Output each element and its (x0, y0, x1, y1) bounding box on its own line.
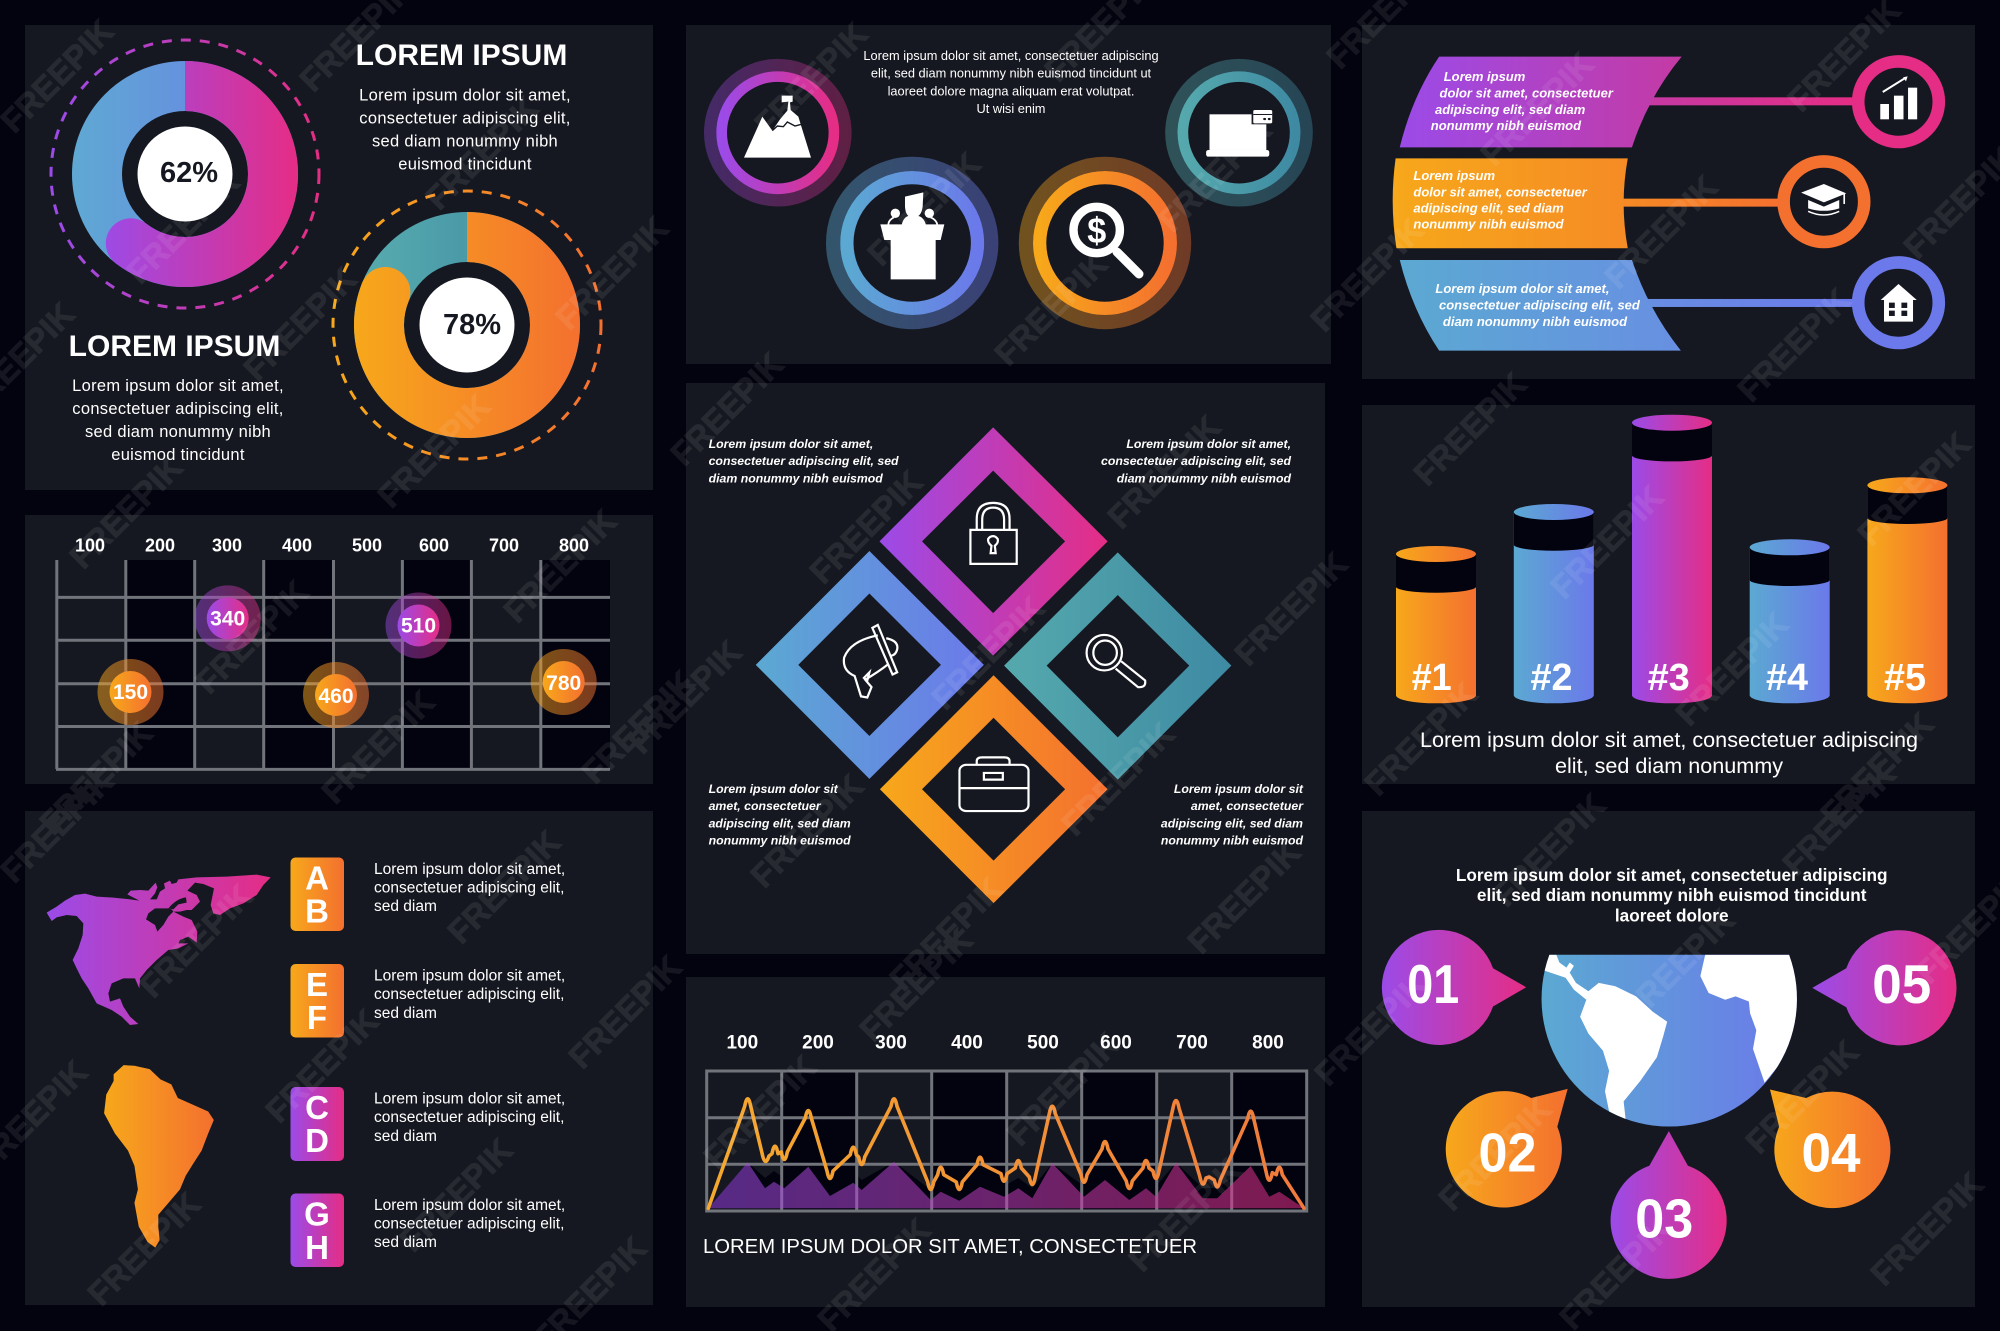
text block: top left: Lorem ipsum dolor sit amet, (709, 437, 873, 451)
watermarks: FREEPIK (1850, 425, 1978, 553)
axis labels: 500 (1027, 1032, 1059, 1054)
axis labels: 100 (75, 536, 105, 556)
text block: C D: consectetuer adipiscing elit, (374, 1109, 564, 1126)
cylinder: #4: #4 (1766, 657, 1808, 699)
icon: laptop (1206, 109, 1273, 157)
ring icon: house (1858, 262, 1939, 343)
text block: intro: Lorem ipsum dolor sit amet, consectetuer adipiscing (863, 48, 1159, 63)
text block: top right: consectetuer adipiscing elit, sed (1101, 454, 1291, 468)
watermarks: FREEPIK (440, 823, 568, 951)
callout: 03 (1611, 1131, 1727, 1279)
cylinder: #2 (1514, 504, 1594, 703)
text block: bottom left: sed diam nonummy nibh (85, 423, 271, 441)
badge: A B: A (305, 860, 329, 897)
text block: top right: Lorem ipsum dolor sit amet, (1126, 437, 1291, 451)
axis labels: 300 (875, 1032, 907, 1054)
text block: E F: sed diam (374, 1005, 437, 1022)
donut chart: 78%: 78% (443, 309, 501, 341)
callout number: 05: 05 (1872, 953, 1931, 1015)
icon: magnifier with dollar (1074, 207, 1139, 274)
caption: elit, sed diam nonummy (1555, 753, 1783, 778)
text block: A B: Lorem ipsum dolor sit amet, (374, 861, 565, 878)
watermarks: FREEPIK (743, 767, 871, 895)
axis labels: 700 (489, 536, 519, 556)
heading: bottom left: LOREM IPSUM (69, 330, 280, 363)
axis labels: 400 (282, 536, 312, 556)
text block: E F (374, 968, 565, 1022)
text block: top right (359, 86, 571, 174)
diamond: megaphone (756, 551, 984, 779)
cylinder: #3 (1632, 415, 1712, 703)
cylinder: #2: #2 (1530, 657, 1572, 699)
caption (1420, 727, 1918, 778)
callout: 02 (1446, 1089, 1568, 1208)
text block: blue band: consectetuer adipiscing elit, sed (1439, 298, 1641, 312)
badge: G H (290, 1194, 344, 1267)
ring icon: bar chart (1858, 61, 1939, 142)
text block: bottom right (1161, 782, 1304, 848)
ring: mountain (710, 65, 845, 200)
text block: A B: consectetuer adipiscing elit, (374, 880, 564, 897)
icon: podium speaker (880, 192, 944, 279)
text block: A B (374, 861, 565, 915)
globe (1541, 952, 1802, 1127)
chart: grid, area and line (707, 1071, 1307, 1211)
watermarks: FREEPIK (1775, 755, 1903, 883)
badge: E F (290, 964, 344, 1038)
callout: 05 (1812, 930, 1957, 1045)
watermarks: FREEPIK (1668, 605, 1796, 733)
badge: C D: C (305, 1089, 329, 1126)
icon: mountain with flag (744, 96, 811, 158)
text block: orange band (1413, 168, 1588, 232)
text block: bottom left: nonummy nibh euismod (709, 834, 851, 848)
band: blue (1400, 260, 1681, 351)
watermarks: FREEPIK (1100, 408, 1228, 536)
panel: icon rings (686, 25, 1331, 364)
watermarks: FREEPIK (663, 345, 791, 473)
callout: 04 (1770, 1090, 1890, 1208)
watermarks: FREEPIK (999, 1025, 1127, 1153)
text block: bottom left: consectetuer adipiscing elit, (72, 400, 284, 418)
panel: donut charts (25, 25, 653, 490)
text block: top right: sed diam nonummy nibh (372, 132, 558, 150)
watermarks: FREEPIK (1227, 545, 1355, 673)
text block: blue band: Lorem ipsum dolor sit amet, (1435, 281, 1609, 296)
text block: C D: Lorem ipsum dolor sit amet, (374, 1090, 565, 1108)
text block: A B: sed diam (374, 898, 437, 915)
icon: briefcase (959, 757, 1029, 811)
watermarks: FREEPIK (860, 145, 988, 273)
axis labels: 100 (726, 1032, 758, 1054)
axis labels: 500 (352, 536, 382, 556)
text block: blue band (1435, 281, 1641, 329)
axis labels: 600 (1100, 1032, 1132, 1054)
watermarks: FREEPIK (1738, 1033, 1866, 1161)
text block: top left (709, 437, 899, 486)
panel: curved bands (1362, 25, 1975, 379)
watermarks: FREEPIK (924, 589, 1052, 717)
badge: C D: D (305, 1122, 329, 1159)
text block: bottom right: amet, consectetuer (1191, 799, 1304, 813)
watermarks: FREEPIK (258, 1002, 386, 1130)
map: south america (104, 1065, 214, 1248)
cylinder: #4 (1750, 539, 1830, 703)
badge: E F: E (306, 966, 328, 1003)
bubble: 150 (98, 659, 164, 725)
text block: E F: consectetuer adipiscing elit, (374, 986, 564, 1003)
diamond: briefcase (880, 675, 1108, 903)
ring: laptop (1171, 65, 1307, 200)
watermarks: FREEPIK (1303, 211, 1431, 339)
text block: C D: sed diam (374, 1128, 437, 1145)
connector: band 2 (1619, 199, 1781, 207)
watermarks: FREEPIK (1357, 675, 1485, 803)
heading: top right: LOREM IPSUM (356, 39, 567, 72)
text block: purple band: Lorem ipsum (1444, 69, 1526, 84)
text block: bottom left: Lorem ipsum dolor sit (709, 782, 839, 796)
icon: padlock (970, 503, 1017, 564)
watermarks: FREEPIK (802, 463, 930, 591)
bubble: 510 (386, 592, 452, 658)
text block: top right: Lorem ipsum dolor sit amet, (359, 86, 571, 104)
text block: C D (374, 1090, 565, 1145)
watermarks: FREEPIK (548, 209, 676, 337)
text block: intro: elit, sed diam nonummy nibh euismod tincidunt ut (871, 66, 1152, 80)
watermarks: FREEPIK (1730, 281, 1858, 409)
badge: C D (290, 1087, 344, 1161)
axis labels: 800 (1252, 1032, 1284, 1054)
text block: bottom left: euismod tincidunt (111, 446, 245, 464)
badge: E F: F (307, 999, 327, 1036)
text block: bottom left: amet, consectetuer (709, 799, 822, 813)
text block: purple band: adipiscing elit, sed diam (1435, 102, 1586, 117)
watermarks: FREEPIK (1151, 111, 1279, 239)
panel: diamond matrix (686, 383, 1325, 954)
connector: band 1 (1640, 97, 1856, 105)
ring: podium (833, 164, 991, 322)
icon: megaphone (844, 625, 897, 697)
watermarks: FREEPIK (314, 683, 442, 811)
watermarks: FREEPIK (1307, 965, 1435, 1093)
text block: orange band: Lorem ipsum (1413, 168, 1495, 183)
watermarks: FREEPIK (392, 1131, 520, 1259)
axis labels: 600 (419, 536, 449, 556)
text block: bottom right: adipiscing elit, sed diam (1161, 816, 1303, 830)
caption: LOREM IPSUM DOLOR SIT AMET, CONSECTETUER (703, 1236, 1197, 1258)
text block: bottom left: adipiscing elit, sed diam (709, 816, 851, 830)
callout number: 03: 03 (1635, 1188, 1693, 1250)
band: orange (1393, 158, 1628, 248)
callout: 01 (1382, 930, 1526, 1045)
text block: purple band: dolor sit amet, consectetuer (1440, 86, 1614, 100)
text block: bottom left: Lorem ipsum dolor sit amet, (72, 377, 284, 395)
text block: G H: sed diam (374, 1234, 437, 1251)
axis labels: 300 (212, 536, 242, 556)
watermarks: FREEPIK (1543, 478, 1671, 606)
icon: magnifier outline (1087, 635, 1145, 687)
text block: blue band: diam nonummy nibh euismod (1443, 314, 1628, 329)
text block: orange band: adipiscing elit, sed diam (1413, 200, 1564, 216)
callout number: 02: 02 (1478, 1122, 1536, 1184)
panel: americas map (25, 811, 653, 1305)
caption: Lorem ipsum dolor sit amet, consectetuer adipiscing (1420, 727, 1918, 752)
bubble: 460: 460 (318, 685, 354, 708)
diamond: lock (880, 427, 1108, 656)
badge: G H: G (304, 1196, 330, 1233)
watermarks: FREEPIK (1406, 365, 1534, 493)
watermarks: FREEPIK (987, 245, 1115, 373)
cylinder: #5 (1867, 477, 1947, 703)
text block: bottom right: Lorem ipsum dolor sit (1174, 782, 1304, 796)
watermarks: FREEPIK (696, 1048, 824, 1176)
watermarks: FREEPIK (62, 448, 190, 576)
ring icon: graduation cap (1784, 161, 1864, 242)
axis labels: 200 (802, 1032, 834, 1054)
text block: globe intro (1456, 865, 1888, 926)
watermarks: FREEPIK (119, 163, 247, 291)
watermarks: FREEPIK (1121, 1151, 1249, 1279)
bubble: 460 (303, 662, 369, 728)
cylinder: #1 (1396, 546, 1476, 703)
watermarks: FREEPIK (1431, 1090, 1559, 1218)
text block: bottom left (709, 782, 851, 848)
watermarks: FREEPIK (496, 502, 624, 630)
panel: globe callouts (1362, 811, 1975, 1307)
text block: purple band: nonummy nibh euismod (1431, 118, 1582, 133)
axis labels: 800 (559, 536, 589, 556)
text block: G H: consectetuer adipiscing elit, (374, 1216, 564, 1233)
text block: top right: consectetuer adipiscing elit, (359, 110, 571, 128)
badge: A B (290, 858, 344, 931)
watermarks: FREEPIK (1813, 705, 1941, 833)
watermarks: FREEPIK (1597, 168, 1725, 296)
cylinder: #3: #3 (1648, 657, 1690, 699)
watermarks: FREEPIK (418, 89, 546, 217)
watermarks: FREEPIK (1180, 833, 1308, 961)
watermarks: FREEPIK (132, 877, 260, 1005)
grid (56, 560, 610, 769)
watermarks: FREEPIK (236, 260, 364, 388)
badge: G H: H (305, 1229, 329, 1266)
bubble: 340: 340 (210, 608, 245, 630)
axis labels: 400 (951, 1032, 983, 1054)
band: purple (1400, 57, 1682, 147)
text block: orange band: dolor sit amet, consectetuer (1413, 184, 1588, 200)
watermarks: FREEPIK (370, 387, 498, 515)
text block: top left: consectetuer adipiscing elit, sed (709, 454, 899, 468)
donut chart: 62% (51, 40, 319, 308)
text block: intro (863, 48, 1159, 116)
text block: top left: diam nonummy nibh euismod (709, 472, 883, 486)
watermarks: FREEPIK (1473, 45, 1601, 173)
bubble: 780: 780 (546, 672, 581, 695)
map: north america (47, 875, 271, 1025)
panel: line chart (686, 977, 1325, 1307)
text block: globe intro: elit, sed diam nonummy nibh euismod tincidunt (1477, 885, 1867, 905)
watermarks: FREEPIK (80, 1185, 208, 1313)
watermarks: FREEPIK (1485, 786, 1613, 914)
watermarks: FREEPIK (32, 714, 160, 842)
donut chart: 78% (333, 191, 601, 459)
text block: bottom right: nonummy nibh euismod (1161, 834, 1303, 848)
diamond: magnifier (1004, 552, 1231, 780)
watermarks: FREEPIK (1614, 901, 1742, 1029)
connector: band 3 (1640, 299, 1856, 307)
text block: intro: laoreet dolore magna aliquam erat volutpat. (888, 84, 1134, 98)
badge: A B: B (305, 893, 329, 930)
text block: E F: Lorem ipsum dolor sit amet, (374, 968, 565, 984)
cylinder: #1: #1 (1412, 657, 1452, 699)
watermarks: FREEPIK (852, 921, 980, 1049)
bubble: 780 (531, 649, 597, 715)
text block: globe intro: laoreet dolore (1615, 906, 1729, 926)
watermarks: FREEPIK (1863, 1165, 1991, 1293)
text block: bottom left (72, 377, 284, 464)
watermarks: FREEPIK (561, 948, 689, 1076)
callout number: 04: 04 (1802, 1122, 1861, 1184)
text block: purple band (1431, 69, 1614, 133)
text block: intro: Ut wisi enim (977, 101, 1045, 116)
axis labels (75, 536, 589, 556)
watermarks: FREEPIK (747, 15, 875, 143)
text block: G H: Lorem ipsum dolor sit amet, (374, 1197, 565, 1214)
callout number: 01: 01 (1407, 953, 1459, 1015)
text block: top right (1101, 437, 1291, 486)
axis labels: 200 (145, 536, 175, 556)
watermarks: FREEPIK (574, 663, 702, 791)
watermarks: FREEPIK (882, 870, 1010, 998)
text block: top right: euismod tincidunt (398, 156, 532, 174)
text block: orange band: nonummy nibh euismod (1413, 216, 1565, 232)
panel: cylinder bars (1362, 405, 1975, 784)
watermarks: FREEPIK (188, 573, 316, 701)
text block: G H (374, 1197, 565, 1251)
bubble: 510: 510 (401, 614, 436, 638)
icon: magnifier with dollar: $ (1087, 210, 1106, 251)
cylinder: #5: #5 (1884, 657, 1926, 699)
bubble: 150: 150 (113, 681, 148, 704)
text block: globe intro: Lorem ipsum dolor sit amet, consectetuer adipiscing (1456, 865, 1888, 885)
panel: bubble grid chart (25, 515, 653, 784)
text block: top right: diam nonummy nibh euismod (1117, 472, 1291, 486)
axis labels: 700 (1176, 1032, 1208, 1054)
ring: dollar search (1026, 164, 1184, 322)
bubble: 340 (195, 585, 261, 651)
watermarks: FREEPIK (1054, 715, 1182, 843)
donut chart: 62%: 62% (160, 157, 218, 189)
watermarks: FREEPIK (621, 633, 749, 761)
axis labels (726, 1032, 1284, 1054)
